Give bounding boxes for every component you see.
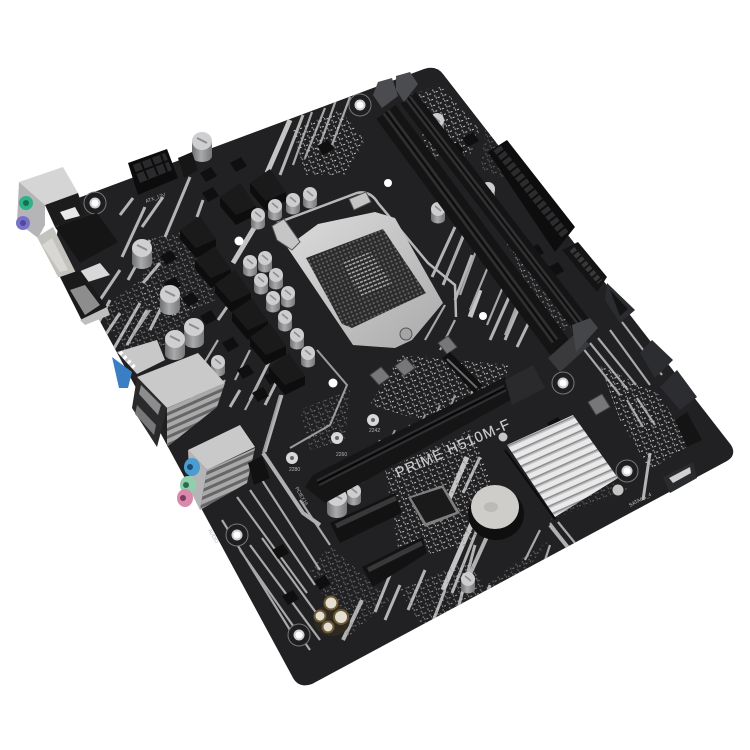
PCIe x1 slot lower xyxy=(362,537,427,587)
LGA contacts xyxy=(342,252,392,298)
M.2 slot xyxy=(442,352,483,393)
HDMI and DP ports xyxy=(60,270,110,325)
silkscreen labels: ATX_12V xyxy=(145,192,167,205)
capacitors xyxy=(132,113,495,594)
mounting holes xyxy=(84,94,638,646)
silkscreen labels: AUDIO xyxy=(206,528,219,545)
SATA port lower xyxy=(663,462,697,493)
blue jack xyxy=(184,458,200,476)
socket inner xyxy=(306,229,426,328)
CMOS battery xyxy=(468,485,524,540)
PCH heatsink xyxy=(498,415,624,519)
PCIe x1 slot upper xyxy=(330,493,402,543)
circuit component traces xyxy=(100,85,690,640)
RAM latches xyxy=(373,78,398,108)
audio capacitors xyxy=(314,596,350,636)
chipset chip xyxy=(408,485,460,527)
SATA port upper xyxy=(605,283,635,323)
inductors xyxy=(370,336,610,415)
retention lever xyxy=(277,192,456,317)
silkscreen labels: SATA6G_4 xyxy=(628,492,653,509)
VGA port xyxy=(37,193,118,282)
PS/2 port xyxy=(16,167,78,238)
board PCB xyxy=(56,68,733,685)
LAN port xyxy=(132,353,225,447)
RAM slots xyxy=(373,72,598,372)
PCIe x16 slot xyxy=(305,365,545,503)
ATX 24-pin connector xyxy=(488,140,575,252)
socket frame xyxy=(287,212,443,348)
motherboard illustration xyxy=(16,68,734,686)
audio header xyxy=(248,456,270,485)
CPU socket xyxy=(272,192,456,348)
silkscreen labels: 2280 xyxy=(289,467,300,473)
audio jacks xyxy=(177,425,255,510)
silkscreen labels xyxy=(145,192,653,545)
green jack xyxy=(180,476,196,494)
silkscreen labels: 2242 xyxy=(369,428,380,434)
USB 3 port xyxy=(112,340,165,388)
M.2 standoffs xyxy=(286,414,379,464)
ATX 12V connector xyxy=(128,149,198,195)
silkscreen labels: 2260 xyxy=(336,452,347,458)
SATA ports stacked xyxy=(640,340,702,447)
product name: PRIME H510M-F xyxy=(393,416,514,482)
silkscreen labels: PCIEX16 xyxy=(293,486,309,507)
pink jack xyxy=(177,489,193,507)
front panel headers xyxy=(562,242,607,292)
VRM chokes xyxy=(180,169,305,395)
socket clips xyxy=(272,219,300,250)
PCB stripe pattern xyxy=(90,97,662,655)
